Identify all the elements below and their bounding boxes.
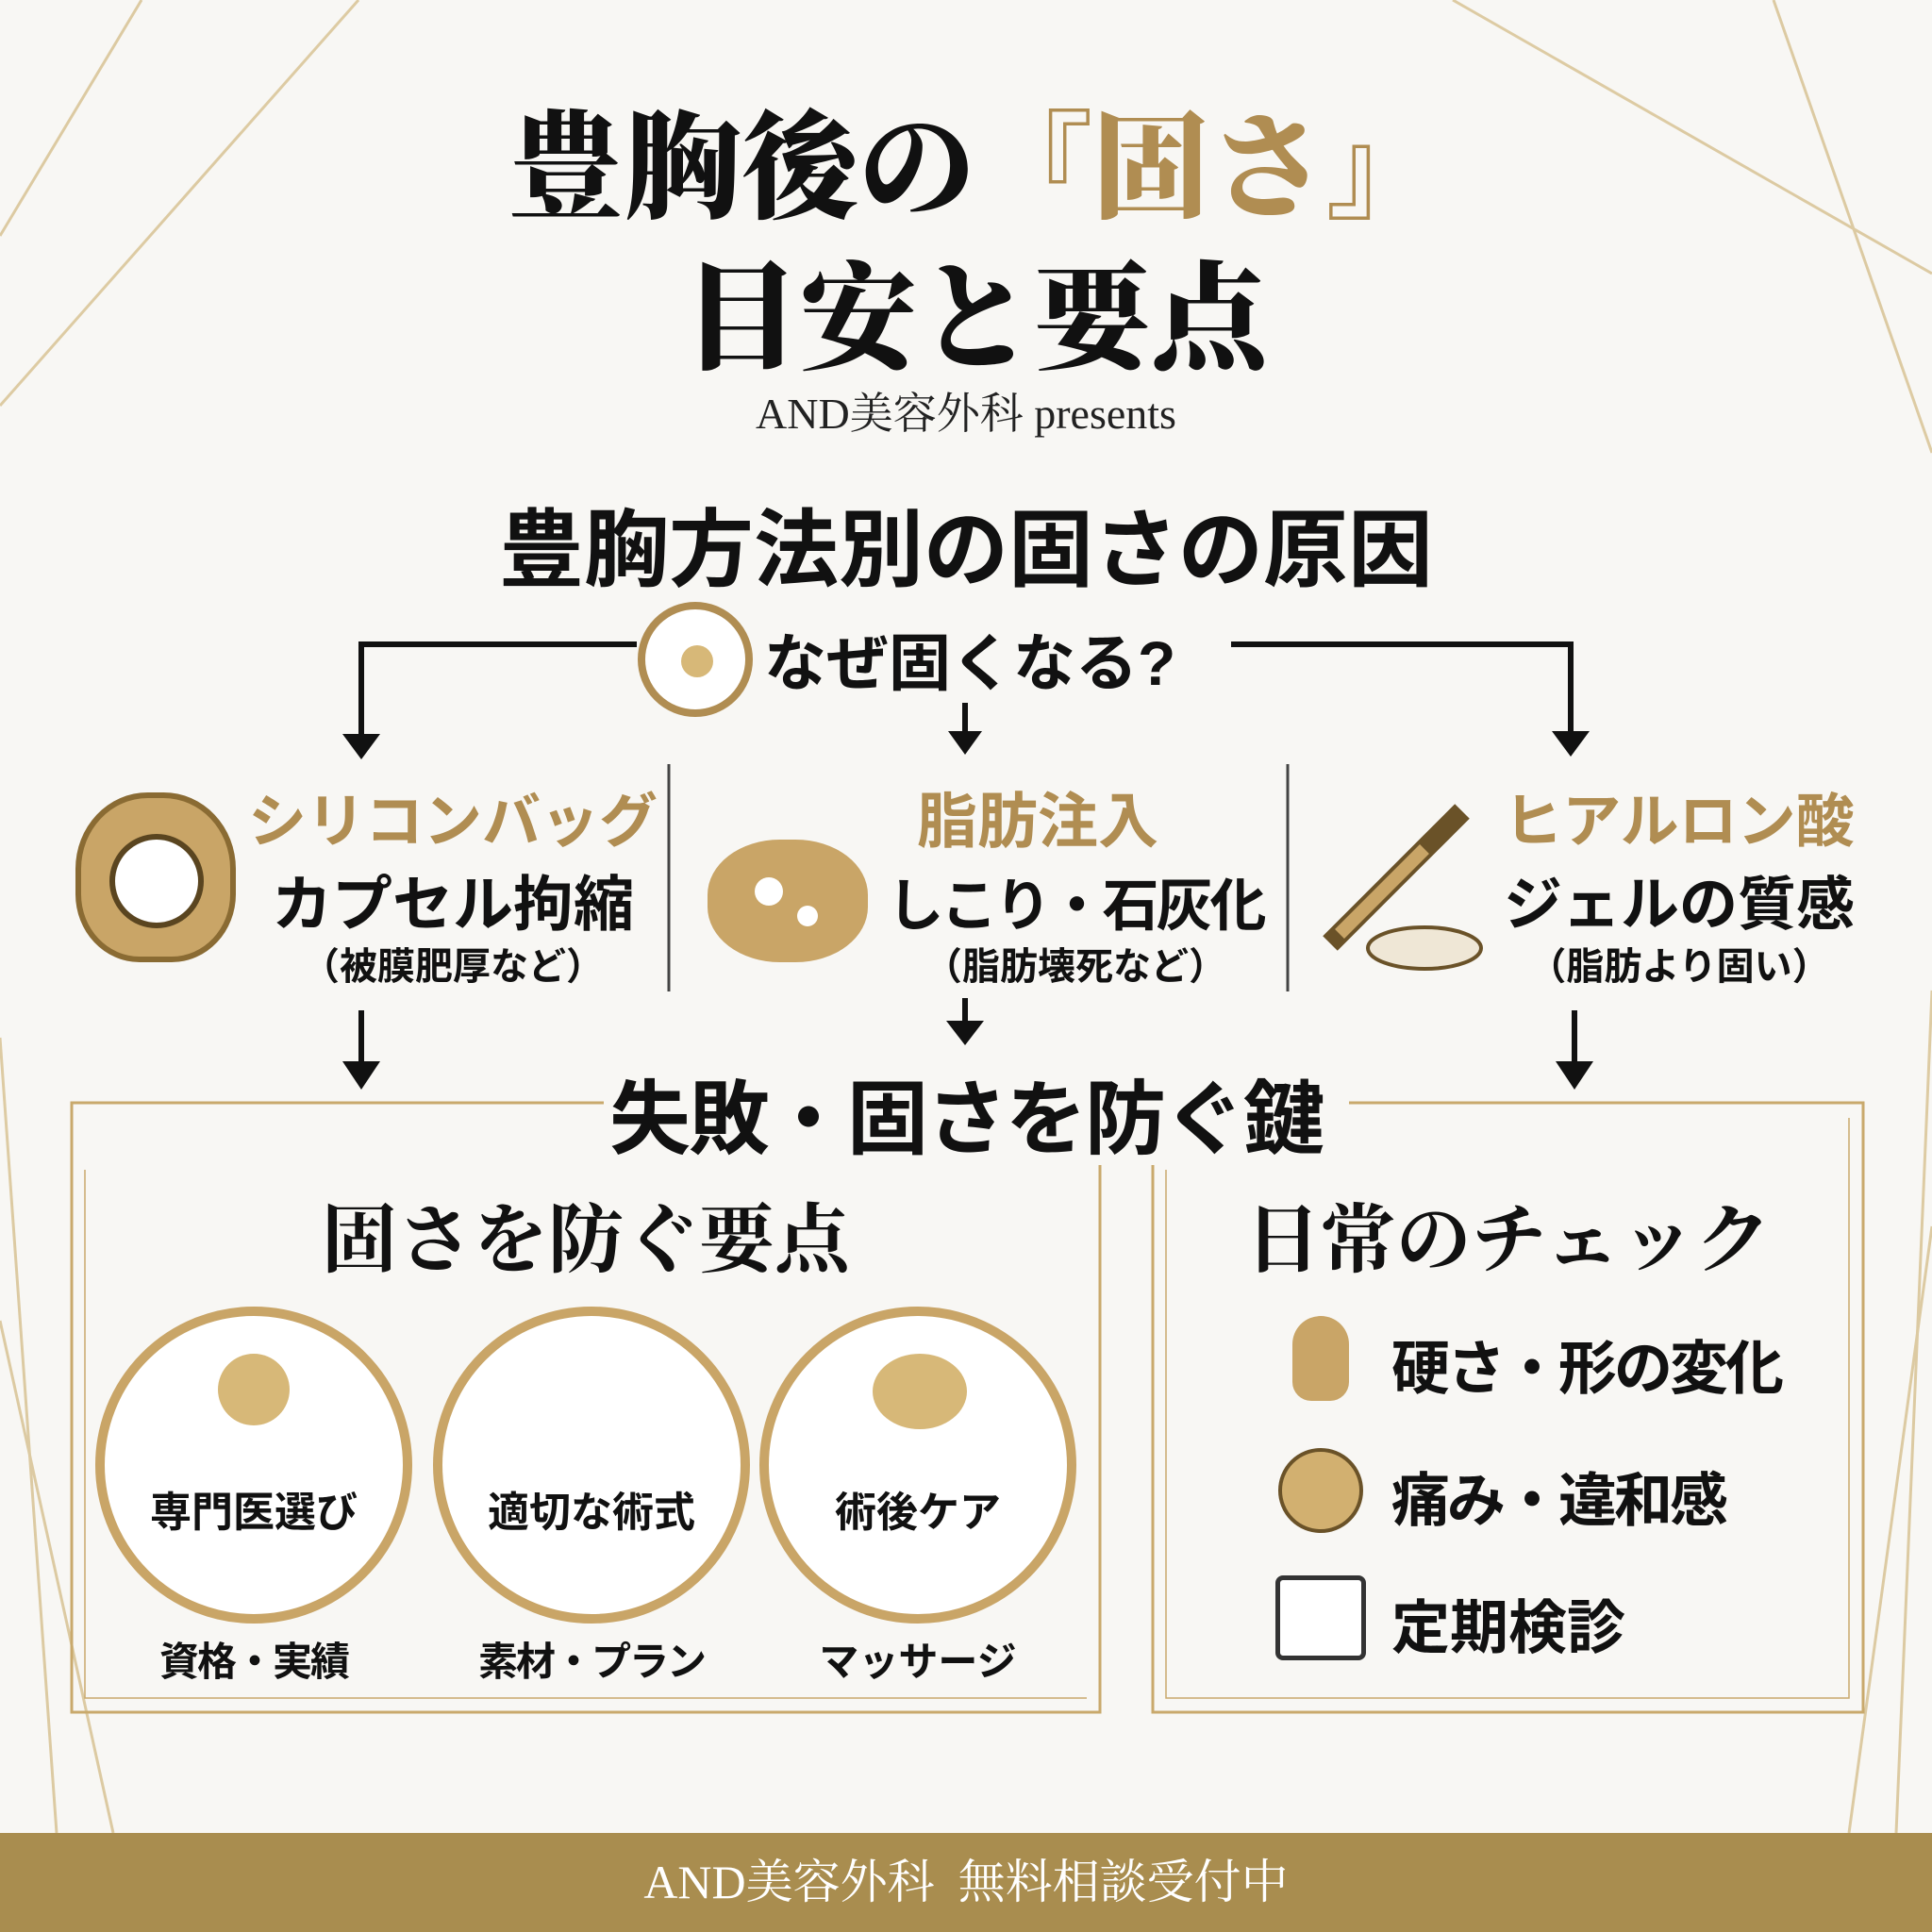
panel: prevention: 資格・実績 [159,1640,348,1684]
column: hyaluronic: （脂肪より固い） [1528,946,1830,988]
circle: aftercare: 術後ケア [835,1490,1001,1536]
panel: daily check: 日常のチェック [1245,1200,1771,1283]
circle: doctor: 専門医選び [150,1490,358,1536]
item: hardness [1292,1316,1783,1402]
column: hyaluronic [1323,790,1855,988]
column: fat: しこり・石灰化 [887,874,1264,938]
circle: technique [433,1307,750,1624]
item: pain [1278,1448,1726,1534]
column: silicone: カプセル拘縮 [272,871,634,939]
key heading: 失敗・固さを防ぐ鍵 [609,1074,1323,1165]
column: hyaluronic: ヒアルロン酸 [1504,790,1855,855]
column: fat: （脂肪壊死など） [924,946,1226,988]
icon: fat lump [708,840,868,962]
item: checkup [1275,1575,1625,1661]
panel: prevention: マッサージ [819,1640,1017,1684]
column: hyaluronic: ジェルの質感 [1504,873,1855,938]
title: 豊胸後の『固さ』 [508,105,1443,234]
heading: 固さを防ぐ要点 [322,1200,850,1283]
footer: AND美容外科 無料相談受付中 [643,1856,1289,1908]
title [508,105,1443,385]
panel: prevention: 素材・プラン [478,1640,705,1684]
title: 目安と要点 [683,256,1268,385]
item: hardness: 硬さ・形の変化 [1391,1337,1781,1402]
column: silicone: シリコンバッグ [248,790,658,855]
panel: prevention [95,1200,1076,1684]
column: fat [708,788,1266,988]
dividers [668,764,670,991]
section heading: 豊胸方法別の固さの原因 [499,504,1433,598]
icon: breast circle [638,602,753,717]
footer [0,1833,1932,1932]
circle: technique: 適切な術式 [488,1490,695,1536]
flow lines [361,644,1574,1066]
circle: doctor [95,1307,412,1624]
column: silicone [75,790,658,988]
question: なぜ固くなる? [764,628,1175,698]
column: fat: 脂肪注入 [917,788,1158,856]
column: silicone: （被膜肥厚など） [302,946,604,988]
subtitle: AND美容外科 presents [756,390,1176,438]
item: checkup: 定期検診 [1391,1596,1625,1661]
box [72,1103,1863,1712]
icon: syringe [1323,804,1483,971]
icon: capsule [75,792,236,962]
panel: daily check [1245,1200,1783,1661]
item: pain: 痛み・違和感 [1391,1469,1725,1534]
circle: aftercare [759,1307,1076,1624]
